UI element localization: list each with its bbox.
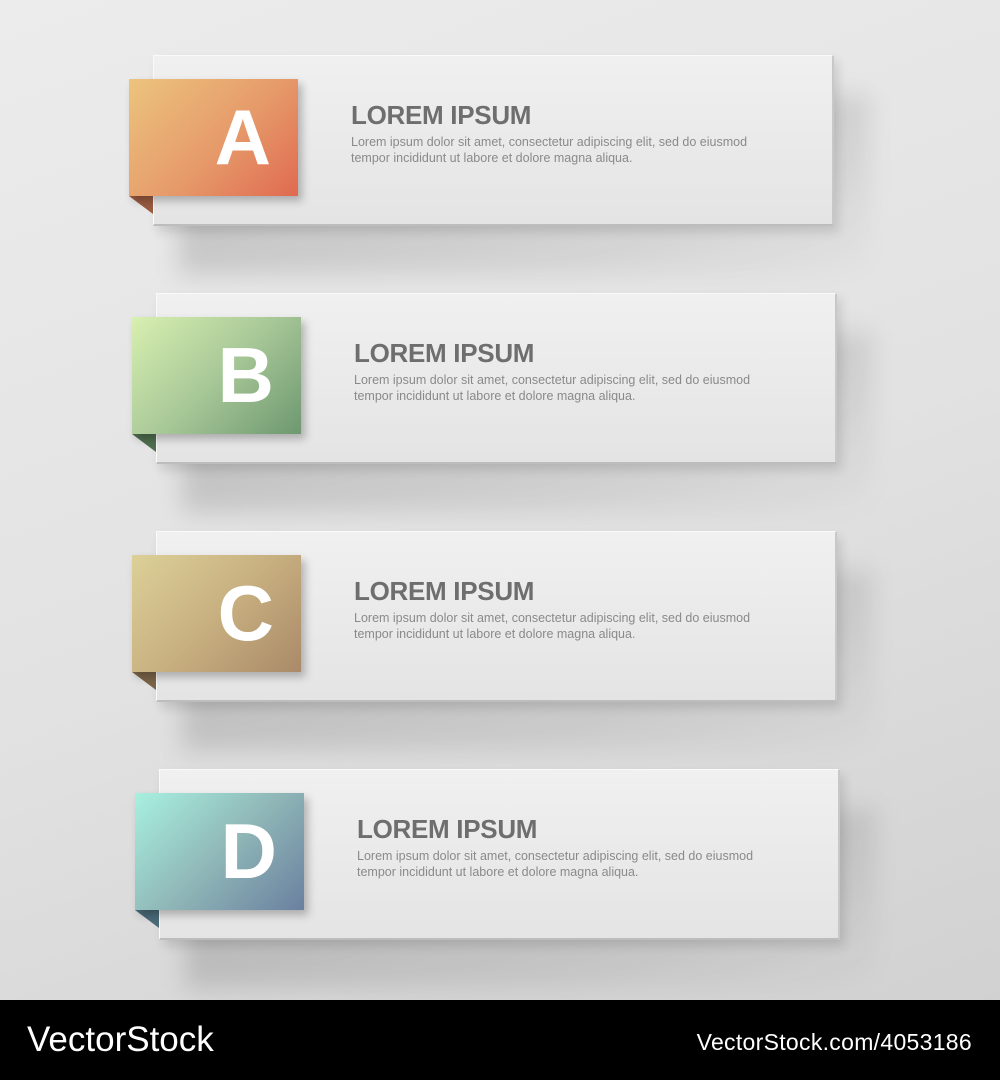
box C bbox=[156, 531, 837, 702]
text B: Lorem ipsum dolor sit amet, consectetur adipiscing elit, sed do eiusmod bbox=[354, 373, 750, 387]
box D bbox=[159, 769, 840, 940]
panel: A bbox=[128, 55, 873, 282]
fold D bbox=[135, 910, 159, 928]
panel: C bbox=[132, 531, 874, 758]
text A bbox=[351, 135, 747, 164]
box B bbox=[156, 293, 837, 464]
panel: D bbox=[134, 769, 878, 996]
box A bbox=[153, 55, 834, 226]
footer bbox=[0, 1000, 1000, 1080]
text C: Lorem ipsum dolor sit amet, consectetur adipiscing elit, sed do eiusmod bbox=[354, 611, 750, 625]
text C: tempor incididunt ut labore et dolore magna aliqua. bbox=[354, 626, 635, 640]
text A: tempor incididunt ut labore et dolore magna aliqua. bbox=[351, 150, 632, 164]
text B: tempor incididunt ut labore et dolore magna aliqua. bbox=[354, 388, 635, 402]
panel: B bbox=[132, 293, 874, 520]
text D: tempor incididunt ut labore et dolore magna aliqua. bbox=[357, 864, 638, 878]
title D: LOREM IPSUM bbox=[357, 814, 537, 844]
tab D bbox=[135, 793, 304, 910]
tab C: C bbox=[218, 569, 274, 657]
fold B bbox=[132, 434, 156, 452]
tab A bbox=[129, 79, 298, 196]
text D bbox=[357, 849, 753, 878]
title B: LOREM IPSUM bbox=[354, 338, 534, 368]
text A: Lorem ipsum dolor sit amet, consectetur adipiscing elit, sed do eiusmod bbox=[351, 135, 747, 149]
fold C bbox=[132, 672, 156, 690]
title A: LOREM IPSUM bbox=[351, 100, 531, 130]
tab B bbox=[132, 317, 301, 434]
title C: LOREM IPSUM bbox=[354, 576, 534, 606]
tab D: D bbox=[221, 807, 277, 895]
text B bbox=[354, 373, 750, 402]
tab A: A bbox=[215, 93, 271, 181]
fold A bbox=[129, 196, 153, 214]
footer url: VectorStock.com/4053186 bbox=[697, 1029, 972, 1055]
tab B: B bbox=[218, 331, 274, 419]
tab C bbox=[132, 555, 301, 672]
text D: Lorem ipsum dolor sit amet, consectetur adipiscing elit, sed do eiusmod bbox=[357, 849, 753, 863]
footer logo: VectorStock bbox=[27, 1020, 214, 1059]
text C bbox=[354, 611, 750, 640]
